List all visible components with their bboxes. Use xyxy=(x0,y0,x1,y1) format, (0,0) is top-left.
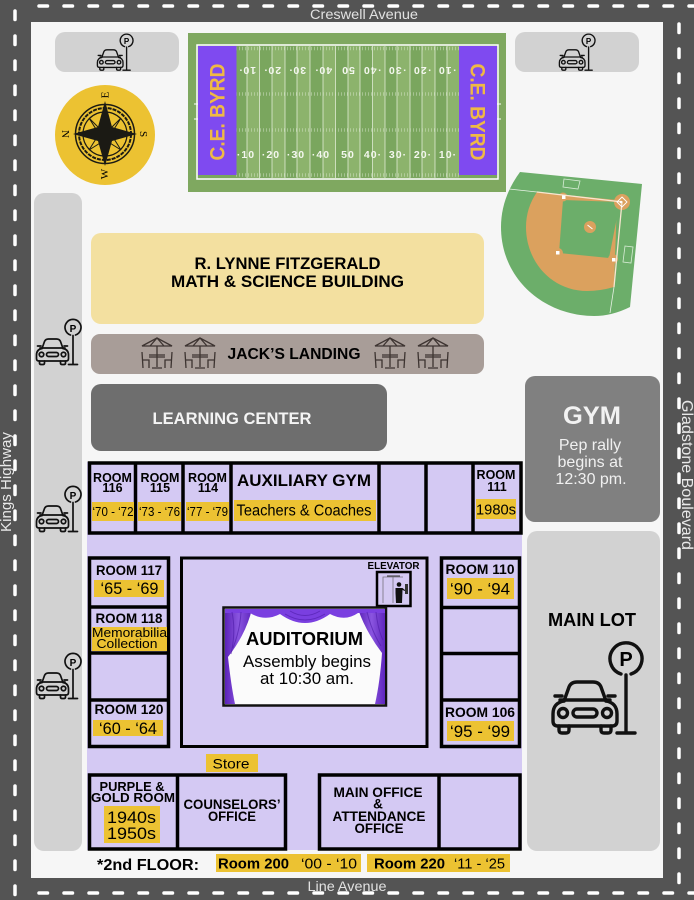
compass xyxy=(55,85,155,185)
room 106 xyxy=(445,704,515,741)
yard numbers: 30· xyxy=(389,149,407,161)
room 114 xyxy=(186,471,229,521)
building: Gym: 12:30 pm. xyxy=(555,471,627,488)
yard numbers xyxy=(237,64,457,161)
bottom row right: Main Office xyxy=(320,775,520,849)
parking lot: top left: P xyxy=(124,37,130,46)
room 117: ROOM 117 xyxy=(96,562,162,578)
yard numbers: ·30 xyxy=(388,64,406,76)
football field: C.E. BYRD xyxy=(206,64,230,160)
street label: Line Avenue: Line Avenue xyxy=(308,879,386,894)
second floor legend: Room 220 xyxy=(374,856,445,872)
room 110: ‘90 - ‘94 xyxy=(450,580,510,598)
counselors office xyxy=(184,797,280,824)
second floor legend: Room 200 xyxy=(218,856,289,872)
stage with curtains: AUDITORIUM xyxy=(246,628,363,649)
yard numbers: 20· xyxy=(263,64,281,76)
building: Math and Science: MATH & SCIENCE BUILDING xyxy=(171,273,404,291)
room 117 xyxy=(94,562,164,598)
room 120 xyxy=(93,701,164,738)
yard numbers: 40· xyxy=(314,64,332,76)
room 111: ROOM xyxy=(477,468,515,482)
parking: Main Lot: MAIN LOT xyxy=(548,610,636,630)
bottom row left: Purple and Gold Room, Counselors xyxy=(90,775,286,849)
parking lot: top left xyxy=(55,32,179,72)
yard numbers: ·10 xyxy=(438,64,456,76)
baseball diamond xyxy=(501,172,642,316)
room 118: Memorabilia xyxy=(92,625,168,640)
building: Learning Center: LEARNING CENTER xyxy=(152,410,312,428)
room 118: Collection xyxy=(96,636,158,651)
yard numbers: 10· xyxy=(439,149,457,161)
building: Math and Science xyxy=(91,233,484,324)
room 106: ROOM 106 xyxy=(445,704,515,720)
elevator xyxy=(368,561,420,606)
school floor background xyxy=(87,462,522,850)
room 120: ‘60 - ‘64 xyxy=(99,719,157,738)
patio: Jack's Landing: JACK’S LANDING xyxy=(228,346,360,363)
parking lot: top right xyxy=(515,32,639,72)
main office text: OFFICE xyxy=(354,821,404,836)
room 106: ‘95 - ‘99 xyxy=(450,722,510,741)
auxiliary gym xyxy=(234,471,376,521)
parking: Main Lot xyxy=(527,531,660,851)
building: Math and Science: R. LYNNE FITZGERALD xyxy=(194,255,381,273)
room 111: 1980s xyxy=(476,502,516,518)
room 116 xyxy=(92,471,134,521)
room 116: ‘70 - ‘72 xyxy=(92,505,134,519)
compass: E xyxy=(100,91,112,98)
left classroom column xyxy=(89,558,169,746)
room 115: ‘73 - ‘76 xyxy=(139,505,180,519)
building: Gym xyxy=(525,376,660,522)
room 110: ROOM 110 xyxy=(446,561,515,577)
auxiliary gym: AUXILIARY GYM xyxy=(237,471,371,490)
street label: Creswell Avenue: Creswell Avenue xyxy=(310,7,418,22)
room 115 xyxy=(138,471,181,521)
store label xyxy=(206,754,258,772)
room 111 xyxy=(476,468,516,519)
room 114: ROOM xyxy=(188,471,227,485)
second floor legend xyxy=(97,854,510,874)
right classroom column xyxy=(441,558,521,746)
room 118 xyxy=(92,610,168,651)
parking icon: middle: P xyxy=(70,491,77,502)
purple and gold room: GOLD ROOM xyxy=(91,790,175,805)
second floor legend: ‘00 - ‘10 xyxy=(301,856,357,872)
counselors office: COUNSELORS’ xyxy=(184,797,280,812)
yard numbers: 20· xyxy=(414,149,432,161)
yard numbers: ·40 xyxy=(312,149,330,161)
room 118: ROOM 118 xyxy=(96,610,163,626)
main office text: MAIN OFFICE xyxy=(334,785,422,800)
room 114: 114 xyxy=(198,481,218,495)
compass: W xyxy=(99,168,111,179)
building: Gym: Pep rally xyxy=(559,437,621,454)
store label: Store xyxy=(212,756,250,772)
main office text xyxy=(332,785,426,836)
yard numbers: 50 xyxy=(341,64,355,76)
auditorium block xyxy=(182,558,427,746)
room 120: ROOM 120 xyxy=(94,701,164,717)
compass: S xyxy=(137,131,149,137)
yard numbers: ·20 xyxy=(413,64,431,76)
parking lot: top right: P xyxy=(586,37,592,46)
football field xyxy=(188,33,506,192)
stage with curtains: at 10:30 am. xyxy=(260,670,354,688)
yard numbers: ·30 xyxy=(287,149,305,161)
building: Gym: GYM xyxy=(563,402,621,430)
room 115: ROOM xyxy=(141,471,179,485)
top classroom row xyxy=(90,463,521,533)
purple and gold room xyxy=(91,779,175,843)
counselors office: OFFICE xyxy=(208,809,256,824)
stage with curtains xyxy=(224,608,386,706)
stage with curtains: Assembly begins xyxy=(243,653,371,671)
room 114: ‘77 - ‘79 xyxy=(187,505,228,519)
purple and gold room: PURPLE & xyxy=(100,779,164,794)
room 110 xyxy=(446,561,515,599)
main office text: & xyxy=(373,796,383,812)
second floor legend: *2nd FLOOR: xyxy=(97,857,199,874)
parking icon: middle xyxy=(36,486,81,532)
elevator: ELEVATOR xyxy=(368,561,420,572)
building: Learning Center xyxy=(91,384,387,451)
patio: Jack's Landing xyxy=(91,334,484,374)
yard numbers: 40· xyxy=(364,149,382,161)
compass: N xyxy=(59,130,71,138)
parking icon: upper xyxy=(36,319,81,364)
yard numbers: 50 xyxy=(341,149,355,161)
building: Gym: begins at xyxy=(558,454,623,471)
yard numbers: 10· xyxy=(238,64,256,76)
second floor legend: ‘11 - ‘25 xyxy=(454,856,505,872)
yard numbers: ·40 xyxy=(363,64,381,76)
parking: Main Lot: P xyxy=(619,649,633,671)
parking icon: upper: P xyxy=(70,324,77,335)
main office text: ATTENDANCE xyxy=(332,809,426,824)
purple and gold room: 1940s xyxy=(107,809,156,827)
room 115: 115 xyxy=(150,481,170,495)
room 116: 116 xyxy=(102,481,123,495)
purple and gold room: 1950s xyxy=(107,825,156,843)
yard numbers: 30· xyxy=(288,64,306,76)
auxiliary gym: Teachers & Coaches xyxy=(236,502,372,520)
room 111: 111 xyxy=(487,480,507,494)
football field: C.E. BYRD xyxy=(466,64,488,160)
yard numbers: ·10 xyxy=(237,149,255,161)
room 117: ‘65 - ‘69 xyxy=(100,579,158,598)
yard numbers: ·20 xyxy=(262,149,280,161)
room 116: ROOM xyxy=(93,471,132,485)
parking lot: left side xyxy=(34,193,82,851)
parking icon: lower: P xyxy=(70,658,77,669)
parking icon: lower xyxy=(36,653,81,698)
